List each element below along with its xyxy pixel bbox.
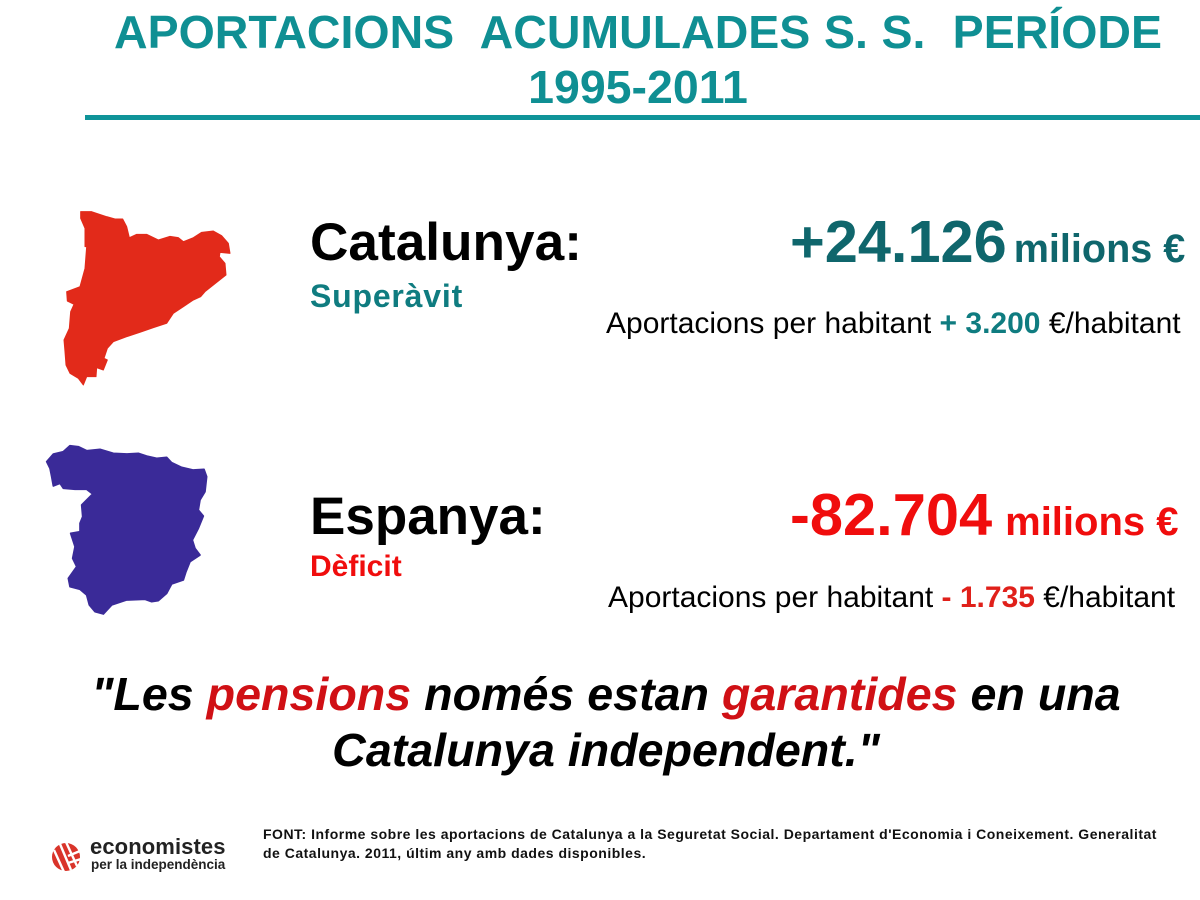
- quote: [91, 668, 1121, 776]
- icon: logo mark: [52, 843, 80, 871]
- panel: Catalunya label: [310, 213, 582, 314]
- heading: Espanya: Espanya:: [310, 487, 546, 546]
- map: Catalunya: [64, 211, 230, 386]
- map: Espanya: [46, 444, 208, 615]
- title underline: [85, 115, 1200, 120]
- source note: [263, 826, 1157, 861]
- panel: Espanya label: [310, 487, 546, 583]
- quote: "Les pensions només estan garantides en una: [91, 668, 1121, 720]
- text: Catalunya per habitant: Aportacions per habitant + 3.200 €/habitant: [606, 307, 1181, 340]
- label: Superàvit: Superàvit: [310, 278, 463, 314]
- figure: Catalunya total: +24.126milions €: [790, 208, 1185, 275]
- source note: FONT: Informe sobre les aportacions de Catalunya a la Seguretat Social. Departament d'Economia i Coneixement. Generalitat: [263, 826, 1157, 842]
- logo: economistes per la independència: [52, 834, 226, 872]
- logo text: economistes: [90, 834, 226, 859]
- text: Espanya per habitant: Aportacions per habitant - 1.735 €/habitant: [608, 581, 1175, 614]
- figure: Espanya total: -82.704 milions €: [790, 481, 1179, 548]
- title: APORTACIONS ACUMULADES S. S. PERÍODE: [114, 6, 1162, 58]
- heading: Catalunya: Catalunya:: [310, 213, 582, 272]
- label: Dèficit: Dèficit: [310, 550, 402, 583]
- quote: Catalunya independent.": [332, 724, 880, 776]
- title: 1995-2011: [528, 61, 748, 113]
- source note: de Catalunya. 2011, últim any amb dades disponibles.: [263, 845, 646, 861]
- logo subtext: per la independència: [91, 857, 225, 872]
- title: [114, 6, 1162, 113]
